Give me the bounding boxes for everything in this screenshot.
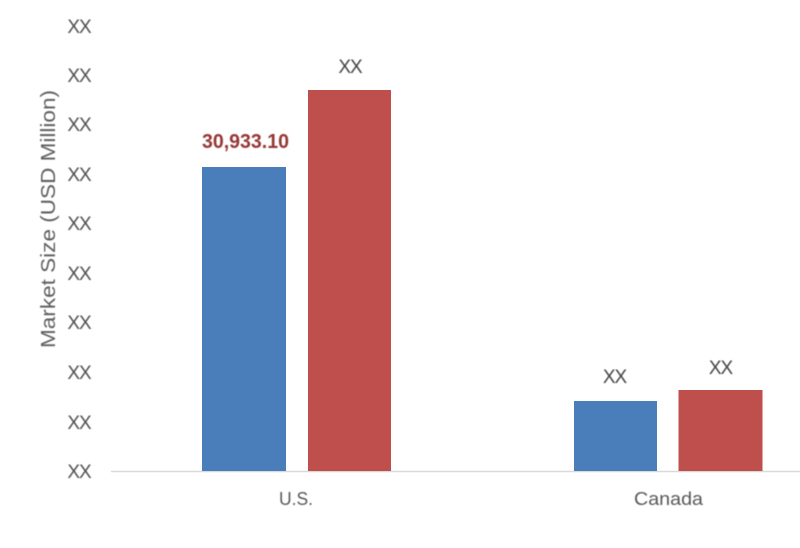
- data labels: XX: [709, 358, 733, 379]
- highlighted data label: 30,933.10: [202, 131, 289, 153]
- y axis title: Market Size (USD Million): [38, 90, 60, 348]
- y axis tick labels: XX: [67, 66, 92, 87]
- x axis labels: U.S.: [279, 489, 313, 509]
- data labels: [338, 57, 733, 388]
- y axis tick labels: XX: [67, 115, 92, 136]
- bars: Canada: [574, 390, 762, 471]
- y axis tick labels: XX: [67, 165, 92, 186]
- x axis labels: Canada: [634, 489, 704, 509]
- y axis tick labels: XX: [67, 214, 92, 235]
- x axis labels: [279, 489, 704, 509]
- data labels: XX: [603, 367, 627, 388]
- y axis tick labels: XX: [67, 413, 92, 434]
- y axis tick labels: XX: [67, 363, 92, 384]
- y axis tick labels: XX: [67, 313, 92, 334]
- bars: U.S.: [202, 90, 391, 471]
- data labels: XX: [338, 57, 363, 78]
- y axis tick labels: [67, 17, 92, 483]
- y axis tick labels: XX: [67, 462, 92, 483]
- y axis tick labels: XX: [67, 17, 92, 38]
- y axis tick labels: XX: [67, 264, 92, 285]
